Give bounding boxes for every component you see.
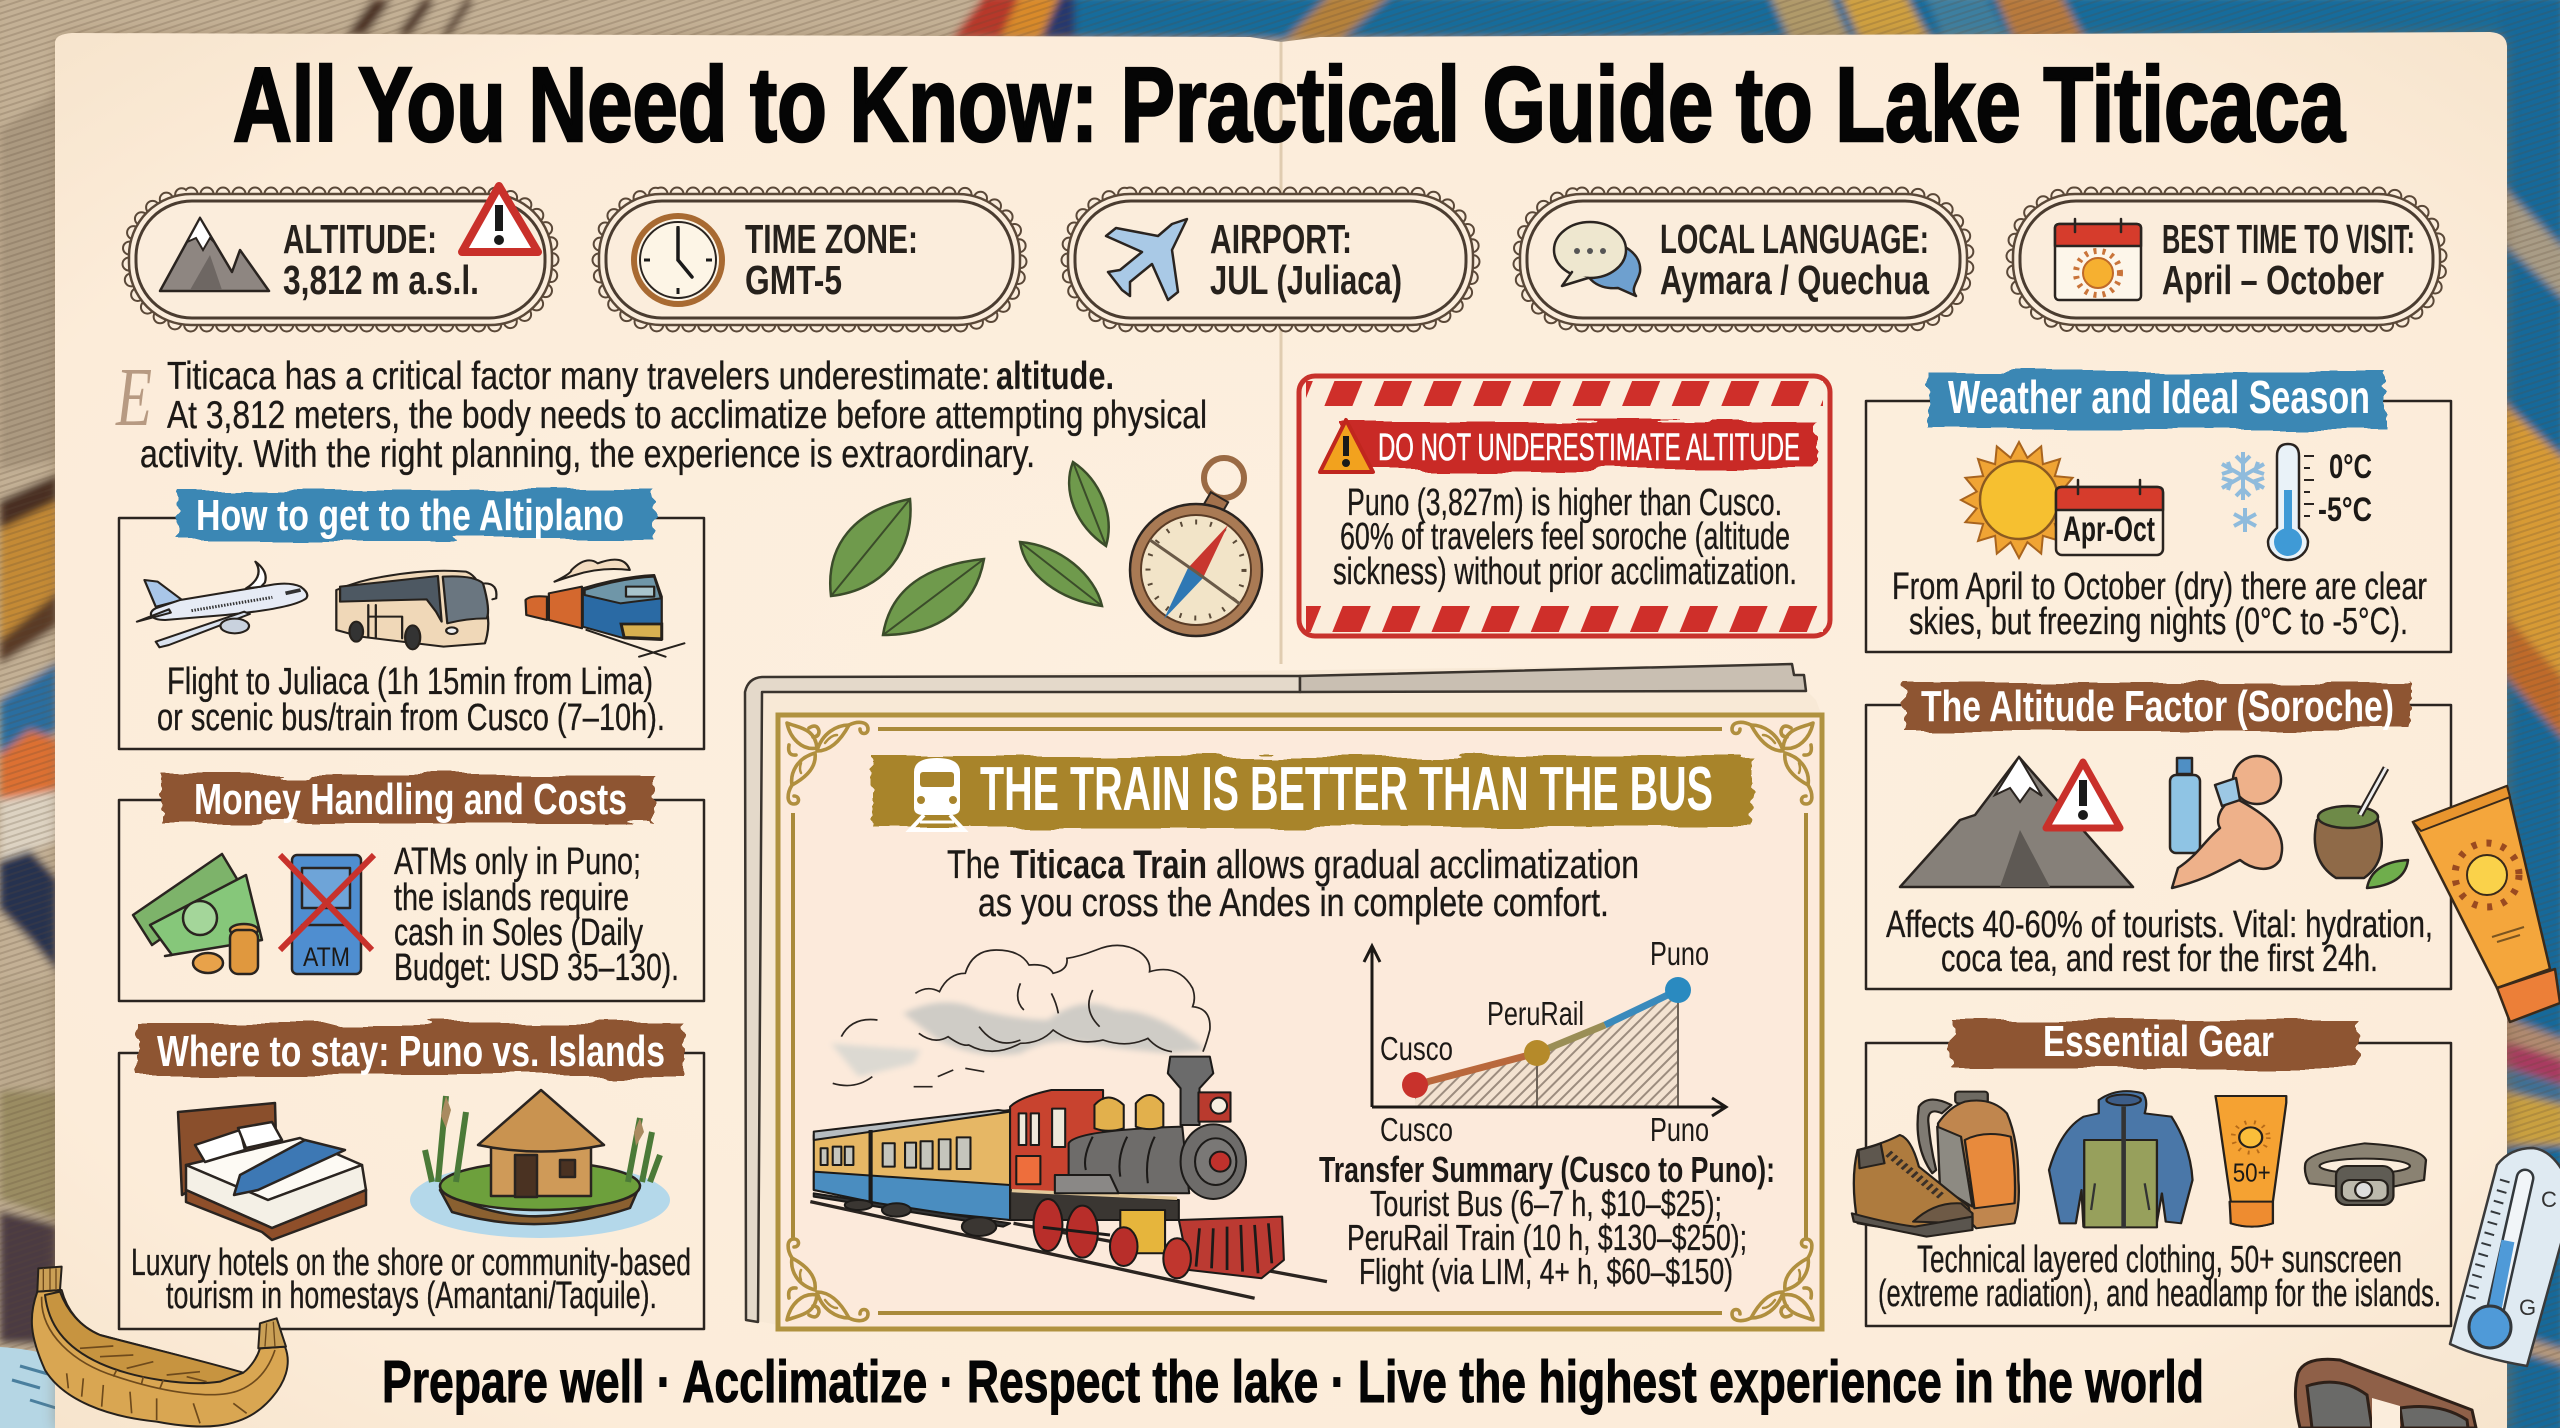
panel: do not underestimate altitude warning: sickness) without prior acclimatization. [1333, 551, 1797, 593]
heading banner: Where to stay: Puno vs. Islands [157, 1027, 665, 1076]
heading banner [1928, 371, 2386, 428]
intro paragraph [115, 351, 1207, 476]
icon: speech bubbles [1554, 222, 1640, 296]
fact pill: best time to visit: April – October [2162, 257, 2384, 303]
heading banner: Money Handling and Costs [194, 775, 627, 824]
transfer summary: PeruRail Train (10 h, $130–$250); [1347, 1217, 1747, 1258]
intro paragraph: altitude. [996, 355, 1114, 398]
panel: money handling and costs [119, 774, 704, 1001]
panel: the altitude factor: coca tea, and rest for the first 24h. [1941, 938, 2378, 980]
heading banner: THE TRAIN IS BETTER THAN THE BUS [980, 755, 1713, 824]
chart: gradual altitude gain [1364, 935, 1726, 1148]
hazard stripes top [1306, 381, 1823, 406]
panel: do not underestimate altitude warning: Puno (3,827m) is higher than Cusco. [1347, 482, 1782, 524]
paper stack [745, 664, 1822, 1325]
fact pill: best time to visit: BEST TIME TO VISIT: [2162, 216, 2415, 262]
locomotive [845, 1057, 1284, 1278]
icon: clock [634, 216, 722, 304]
icon: sun with calendar: Apr-Oct [2063, 510, 2155, 549]
panel: where to stay: tourism in homestays (Amantani/Taquile). [166, 1275, 657, 1317]
rising line [1402, 977, 1691, 1098]
text block: cash in Soles (Daily [394, 912, 643, 954]
icon: jacket [2049, 1091, 2193, 1228]
panel: weather and ideal season: skies, but freezing nights (0°C to -5°C). [1909, 601, 2408, 643]
decoration: large sunscreen tube [2413, 786, 2560, 1022]
panel: do not underestimate altitude warning [1299, 376, 1830, 636]
icon: sun with calendar [1961, 442, 2163, 558]
icon: compass [1130, 458, 1262, 636]
chart: gradual altitude gain: Cusco [1380, 1030, 1453, 1067]
icon: sun calendar [2055, 219, 2141, 300]
panel: how to get to the Altiplano: Flight to Juliaca (1h 15min from Lima) [167, 661, 653, 703]
icon: backpack [1918, 1092, 2019, 1228]
panel: how to get to the Altiplano [119, 490, 704, 749]
icon: hiking boot [1852, 1135, 1972, 1237]
fact pill: altitude [129, 186, 552, 325]
icons: plane, bus, train [137, 560, 684, 657]
text block [394, 841, 679, 989]
icon: snowflakes and thermometer: 0°C [2329, 448, 2372, 486]
panel: essential gear [1852, 1017, 2451, 1326]
track [810, 1202, 1327, 1298]
panel: the altitude factor [1866, 682, 2451, 989]
icon: headlamp [2305, 1143, 2426, 1205]
icon: hotel bed [178, 1103, 366, 1240]
heading banner [872, 755, 1752, 830]
hazard stripes bottom [1306, 606, 1823, 632]
decoration: sunglasses [2295, 1359, 2476, 1428]
intro text: as you cross the Andes in complete comfort. [978, 881, 1609, 925]
fact pill: airport: JUL (Juliaca) [1210, 257, 1402, 303]
intro paragraph: activity. With the right planning, the experience is extraordinary. [140, 433, 1035, 476]
text block: Budget: USD 35–130). [394, 947, 679, 989]
text block: ATMs only in Puno; [394, 841, 641, 883]
corner ornaments [787, 722, 1813, 1321]
icon: crossed out ATM: ATM [303, 942, 350, 972]
illustration: steam train [810, 945, 1327, 1298]
lake water [0, 1347, 332, 1428]
icon: sunscreen: 50+ [2233, 1158, 2271, 1188]
icon: warning triangle [462, 186, 538, 252]
intro paragraph: At 3,812 meters, the body needs to acclimatize before attempting physical [167, 394, 1207, 437]
fact pill: time zone [599, 194, 1020, 325]
icon: bus [336, 571, 496, 649]
text block: the islands require [394, 877, 629, 919]
icon: airplane [1106, 219, 1187, 300]
icon: person drinking water [2170, 756, 2282, 888]
transfer summary [1319, 1149, 1775, 1292]
panel: do not underestimate altitude warning: 60% of travelers feel soroche (altitude [1340, 516, 1790, 558]
fact pill: airport: AIRPORT: [1210, 216, 1352, 262]
warning banner: DO NOT UNDERESTIMATE ALTITUDE [1378, 427, 1800, 469]
icon: banknotes and coins [133, 854, 262, 974]
panel: where to stay: Luxury hotels on the shore or community-based [131, 1242, 691, 1284]
icon: train front [910, 758, 964, 830]
heading banner: Essential Gear [2043, 1017, 2274, 1066]
icon: mountain with warning sign [1900, 757, 2133, 887]
icon: airplane [137, 562, 307, 647]
fact pill: altitude: 3,812 m a.s.l. [283, 257, 479, 303]
chart: gradual altitude gain: Puno [1650, 935, 1709, 972]
coaches [814, 1110, 1010, 1227]
icon: sunscreen [2215, 1096, 2286, 1227]
panel: how to get to the Altiplano: or scenic bus/train from Cusco (7–10h). [157, 697, 665, 739]
icon: mate cup with coca leaf [2315, 768, 2408, 888]
icon: mountains [160, 218, 269, 291]
intro text [947, 843, 1639, 925]
icon: train [526, 560, 684, 657]
heading banner: How to get to the Altiplano [196, 491, 624, 540]
intro text: The [947, 843, 1000, 887]
transfer summary: Flight (via LIM, 4+ h, $60–$150) [1359, 1251, 1733, 1292]
decoration: thermometer: C [2541, 1187, 2557, 1212]
fact pill: local language: LOCAL LANGUAGE: [1660, 216, 1929, 262]
fact pill: airport [1068, 194, 1473, 325]
drop cap: E [115, 351, 152, 444]
fact pill: time zone: GMT-5 [745, 257, 842, 303]
decoration: thermometer [2450, 1148, 2560, 1366]
decoration: thermometer: G [2519, 1295, 2536, 1320]
icon: snowflakes and thermometer: -5°C [2318, 491, 2372, 529]
heading banner: The Altitude Factor (Soroche) [1921, 682, 2394, 731]
panel: weather and ideal season [1866, 371, 2451, 652]
icon: coca leaves [830, 462, 1109, 635]
warning banner [1320, 420, 1816, 472]
axes [1364, 946, 1726, 1116]
fact pill: altitude: ALTITUDE: [283, 216, 437, 262]
intro text: allows gradual acclimatization [1216, 843, 1639, 887]
icon: hut on reed island [410, 1090, 670, 1238]
chart: gradual altitude gain: Puno [1650, 1111, 1709, 1148]
panel: train feature [745, 664, 1822, 1329]
fact pill: time zone: TIME ZONE: [745, 216, 918, 262]
decoration: reed boat [32, 1267, 288, 1427]
intro paragraph: Titicaca has a critical factor many travelers underestimate: [167, 355, 990, 398]
fact pill: best time to visit [2013, 194, 2440, 325]
icon: crossed out ATM [280, 855, 374, 974]
transfer summary: Transfer Summary (Cusco to Puno): [1319, 1149, 1775, 1190]
icon: snowflakes and thermometer [2222, 444, 2372, 560]
panel: where to stay [119, 1024, 704, 1329]
chart: gradual altitude gain: Cusco [1380, 1111, 1453, 1148]
transfer summary: Tourist Bus (6–7 h, $10–$25); [1370, 1183, 1722, 1224]
gear icons [1852, 1091, 2426, 1237]
fact pill: local language: Aymara / Quechua [1660, 257, 1930, 303]
chart: gradual altitude gain: PeruRail [1487, 995, 1584, 1032]
heading banner: Weather and Ideal Season [1948, 371, 2370, 423]
fact pill: local language [1520, 194, 1967, 325]
smoke [831, 945, 1210, 1087]
intro text: Titicaca Train [1010, 843, 1207, 887]
